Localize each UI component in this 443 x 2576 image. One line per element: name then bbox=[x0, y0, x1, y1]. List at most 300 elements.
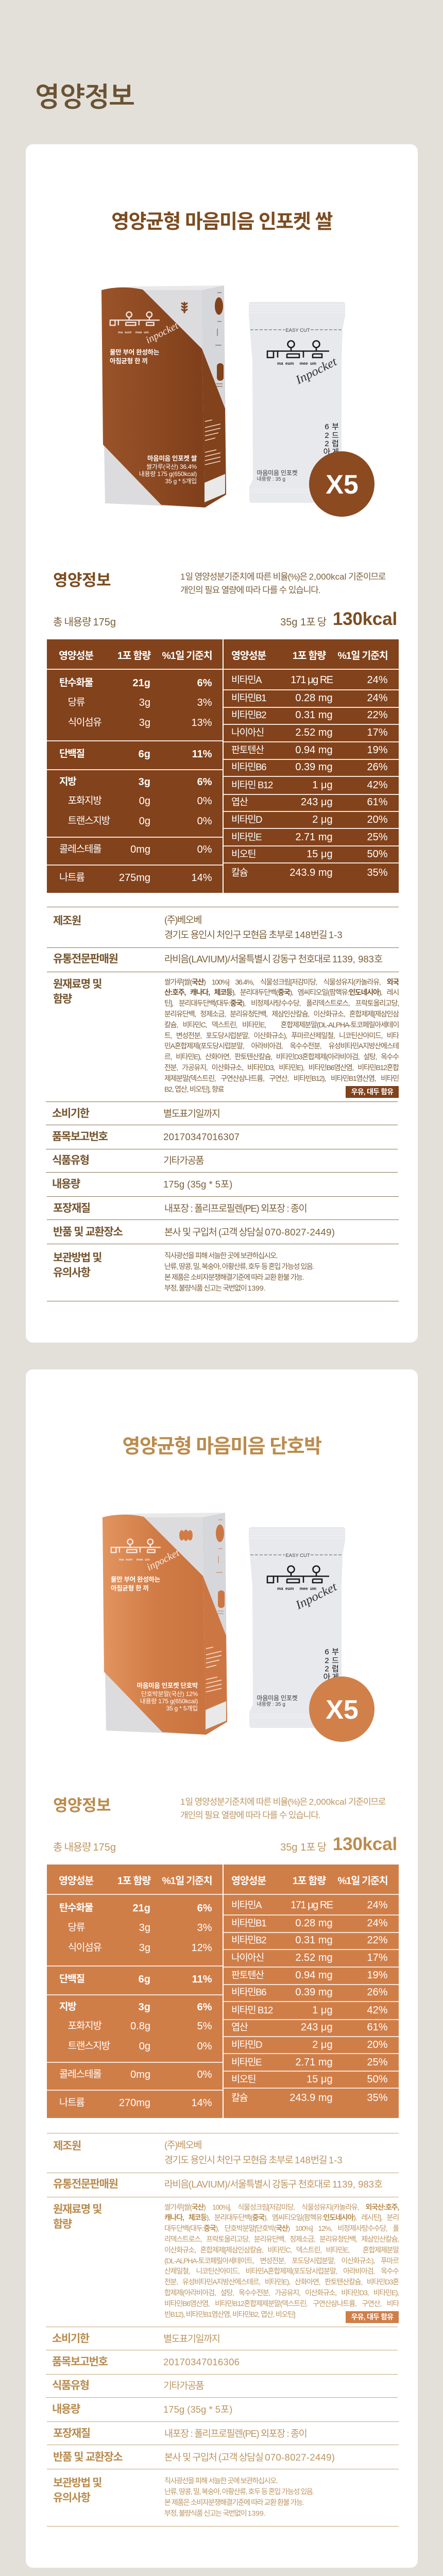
nutrition note: 1일 영양성분기준치에 따른 비율(%)은 2,000kcal 기준이므로 bbox=[180, 572, 385, 582]
table: macronutrients: 3g bbox=[139, 2002, 150, 2013]
box: 아침균형 한 끼 bbox=[111, 1584, 149, 1592]
total volume: 총 내용량 175g bbox=[53, 1842, 116, 1853]
table: vitamins and minerals: 25% bbox=[367, 832, 387, 843]
info: food type: 식품유형 bbox=[52, 2380, 89, 2392]
table: vitamins and minerals bbox=[224, 639, 399, 893]
table: macronutrients: 0g bbox=[139, 2041, 150, 2052]
info: ingredients: 트, 변성전분, 포도당시럽분말, 이산화규소), 푸마르산제일철, 니코틴산아미드, 비타 bbox=[164, 1031, 399, 1040]
nutrition heading: 영양정보 bbox=[53, 571, 111, 589]
table: vitamins and minerals: 0.39 mg bbox=[295, 761, 333, 773]
info: ingredients: 제제분말(덱스트린, 구연산삼나트륨, 구연산, 비타빈B12), 비타민B1염산염, 비타민 bbox=[164, 1074, 399, 1082]
table: macronutrients: 탄수화물 bbox=[59, 1902, 93, 1913]
table: macronutrients: 3g bbox=[139, 776, 150, 788]
table: macronutrients: 0% bbox=[197, 816, 212, 827]
nutrition heading: 영양정보 bbox=[53, 1797, 111, 1815]
box: 마음미음 인포켓 단호박 bbox=[137, 1682, 198, 1689]
table: vitamins and minerals: 비타민A bbox=[231, 1900, 261, 1910]
table: vitamins and minerals: 243 μg bbox=[301, 2022, 333, 2033]
nutrition note bbox=[180, 1797, 386, 1820]
pouch: 6 bbox=[325, 422, 329, 431]
info: ingredients: 산:호주, 캐나다, 체코등), 분리대두단백(중국), 엠씨티오일(팜핵유:인도네시아), 레시 bbox=[164, 988, 399, 996]
info: storage bbox=[47, 2469, 399, 2527]
info: manufacturer: (주)베오베 bbox=[164, 2140, 201, 2150]
table: vitamins and minerals: 0.94 mg bbox=[295, 1970, 333, 1981]
box: inpocket bbox=[144, 320, 180, 346]
pouch: Inpocket bbox=[293, 355, 340, 387]
table: macronutrients: 270mg bbox=[119, 2097, 150, 2109]
pouch: 마음미음 인포켓 bbox=[257, 1694, 298, 1702]
panel: rice bbox=[26, 144, 418, 1343]
table: vitamins and minerals: 0.39 mg bbox=[295, 1987, 333, 1998]
table: vitamins and minerals: 35% bbox=[367, 2092, 387, 2104]
table: macronutrients: 콜레스테롤 bbox=[59, 2069, 101, 2080]
table: vitamins and minerals: 비타민B6 bbox=[231, 761, 266, 772]
info: storage: 직사광선을 피해 서늘한 곳에 보관하십시오. bbox=[164, 2477, 277, 2485]
info: ingredients bbox=[47, 2197, 399, 2327]
table: vitamins and minerals: 0.94 mg bbox=[295, 744, 333, 756]
info: storage: 본 제품은 소비자분쟁해결기준에 따라 교환 환불 가능. bbox=[164, 2498, 303, 2506]
calories per pouch bbox=[280, 1834, 397, 1854]
info: report number: 품목보고번호 bbox=[52, 2356, 108, 2368]
info: expiry: 소비기한 bbox=[52, 2333, 89, 2345]
info: ingredients: 분리유단백, 정제소금, 분리유청단백, 제삼인산칼슘, 이산화규소, 혼합제제[제삼인삼 bbox=[164, 1010, 399, 1018]
table: vitamins and minerals: 비타민E bbox=[231, 2057, 261, 2067]
info: ingredients: 비타민B6염산염, 비타민B12혼합제제분말(덱스트린, 구연산삼나트륨, 구연산, 비타 bbox=[164, 2299, 399, 2308]
table: vitamins and minerals: 50% bbox=[367, 849, 387, 860]
info: ingredients: B2, 엽산, 비오틴], 향료 bbox=[164, 1085, 224, 1093]
info: packaging bbox=[47, 2421, 399, 2445]
table: vitamins and minerals: 22% bbox=[367, 709, 387, 721]
table: macronutrients bbox=[47, 1865, 223, 2118]
table: macronutrients: %1일 기준치 bbox=[162, 650, 212, 662]
allergen tag bbox=[346, 2311, 399, 2323]
table: vitamins and minerals: 2.52 mg bbox=[295, 1952, 333, 1963]
table: macronutrients: 0% bbox=[197, 2041, 212, 2052]
table: vitamins and minerals: 영양성분 bbox=[231, 650, 266, 662]
table: vitamins and minerals: 50% bbox=[367, 2074, 387, 2085]
info: packaging: 내포장 : 폴리프로필렌(PE) 외포장 : 종이 bbox=[164, 1203, 306, 1214]
table: macronutrients: 0% bbox=[197, 795, 212, 807]
table: vitamins and minerals: 24% bbox=[367, 674, 387, 686]
table: macronutrients: %1일 기준치 bbox=[162, 1875, 212, 1887]
pouch: 게 bbox=[332, 1673, 339, 1682]
table: vitamins and minerals: 비타민 B12 bbox=[231, 779, 272, 790]
info: ingredients bbox=[47, 972, 399, 1101]
pouch: 2 bbox=[325, 431, 329, 440]
table: macronutrients: 6g bbox=[139, 749, 150, 760]
table: macronutrients: 단백질 bbox=[59, 1974, 84, 1985]
table: macronutrients: 트랜스지방 bbox=[68, 816, 110, 826]
table: vitamins and minerals: 2.71 mg bbox=[295, 2057, 333, 2068]
info: storage: 부정, 불량식품 신고는 국번없이 1399. bbox=[164, 2509, 266, 2517]
table: vitamins and minerals: 칼슘 bbox=[231, 867, 247, 878]
table: vitamins and minerals: 17% bbox=[367, 727, 387, 738]
pouch: 아 bbox=[323, 1673, 331, 1682]
info: expiry: 별도표기일까지 bbox=[163, 1108, 219, 1119]
info: packaging: 포장재질 bbox=[53, 2428, 90, 2439]
table: macronutrients: 12% bbox=[191, 1942, 212, 1954]
table: vitamins and minerals: 42% bbox=[367, 779, 387, 791]
nutrition note: 개인의 필요 열량에 따라 다를 수 있습니다. bbox=[180, 585, 320, 595]
box bbox=[101, 285, 226, 507]
table: macronutrients: 3% bbox=[197, 697, 212, 708]
table: macronutrients: 11% bbox=[192, 749, 212, 760]
table: vitamins and minerals: 15 μg bbox=[306, 849, 333, 860]
box: 아침균형 한 끼 bbox=[110, 357, 148, 365]
table: macronutrients: 영양성분 bbox=[59, 1875, 93, 1887]
info: ingredients: 쌀가루[쌀(국산) 100%], 식물성크림[저감미당, 식물성유지(카놀라유, 외국산:호주, bbox=[164, 2203, 399, 2211]
info: returns: 본사 및 구입처 (고객 상담실 070-8027-2449) bbox=[164, 2452, 334, 2463]
info: storage: 난류, 땅콩, 밀, 복숭아, 아황산류, 호두 등 혼입 가능성 있음. bbox=[164, 1262, 314, 1270]
info: report number bbox=[46, 1125, 398, 1149]
pouch: 2 bbox=[325, 1656, 329, 1665]
info: ingredients: 전분, 가공유지, 이산화규소, 비타민D3, 비타민E), 비타민B6염산염, 비타민B12혼합 bbox=[164, 1063, 399, 1072]
table: vitamins and minerals: 35% bbox=[367, 867, 387, 878]
info: returns bbox=[47, 1219, 399, 1244]
pouch: 게 bbox=[332, 448, 339, 456]
info: distributor bbox=[47, 947, 399, 972]
pouch: 내용량 : 35 g bbox=[257, 1701, 285, 1707]
info: ingredients: 대두단백(대두:중국), 단호박분말[단호박(국산) 100%] 12%, 비정제사탕수수당, 폴 bbox=[164, 2224, 399, 2232]
info: manufacturer: 제조원 bbox=[53, 2140, 81, 2152]
info: ingredients: 쌀가루[쌀(국산) 100%] 36.4%, 식물성크림[저감미당, 식물성유지(카놀라유, 외국 bbox=[164, 978, 399, 986]
info: ingredients: 캐나다, 체코등), 분리대두단백(중국), 엠씨티오일(팜핵유:인도네시아), 레시틴], 분리 bbox=[164, 2213, 399, 2222]
info: volume bbox=[46, 1172, 398, 1197]
info: volume: 내용량 bbox=[52, 2403, 80, 2415]
table: vitamins and minerals: 1 μg bbox=[312, 779, 333, 791]
table: vitamins and minerals: 19% bbox=[367, 1970, 387, 1981]
table: macronutrients: 0g bbox=[139, 795, 150, 807]
table: vitamins and minerals: 1 μg bbox=[312, 2005, 333, 2016]
info: ingredients: 전분, 유성비타민A지방산에스테르, 비타민E), 산화아연, 판토텐산칼슘, 비타민D3혼 bbox=[164, 2278, 399, 2286]
table: vitamins and minerals: 243.9 mg bbox=[289, 867, 333, 878]
info: ingredients: (DL-ALPHA-토코페릴아세테이트, 변성전분, 포도당시럽분말, 이산화규소), 푸마르 bbox=[164, 2257, 399, 2265]
calories per pouch: 130kcal bbox=[333, 1834, 397, 1854]
product image: box and pouch x5 bbox=[101, 285, 374, 517]
table: vitamins and minerals: 비타민B2 bbox=[231, 709, 266, 720]
info: storage: 유의사항 bbox=[53, 2492, 90, 2504]
pouch: 드 bbox=[332, 1656, 339, 1665]
pouch: 6 bbox=[325, 1648, 329, 1656]
table: vitamins and minerals: 비타민 B12 bbox=[231, 2005, 272, 2015]
table: vitamins and minerals: 1포 함량 bbox=[293, 1875, 326, 1887]
info: manufacturer: 경기도 용인시 처인구 모현읍 초부로 148번길 1-3 bbox=[164, 2155, 343, 2165]
table: vitamins and minerals: 17% bbox=[367, 1952, 387, 1963]
info: ingredients: 함량 bbox=[53, 2218, 72, 2230]
box bbox=[103, 1513, 227, 1735]
table: macronutrients: 14% bbox=[191, 872, 212, 884]
table: vitamins and minerals: 비오틴 bbox=[231, 2074, 255, 2084]
info: ingredients: 원재료명 및 bbox=[53, 2203, 101, 2215]
table: vitamins and minerals: %1일 기준치 bbox=[338, 1875, 387, 1887]
table: macronutrients: 21g bbox=[133, 1902, 150, 1913]
info: storage: 부정, 불량식품 신고는 국번없이 1399. bbox=[164, 1284, 266, 1292]
info: distributor bbox=[47, 2173, 399, 2197]
table: vitamins and minerals: 0.28 mg bbox=[295, 1918, 333, 1929]
table: vitamins and minerals: 비타민B1 bbox=[231, 1918, 266, 1928]
table: vitamins and minerals: 1포 함량 bbox=[293, 650, 326, 662]
info: food type: 기타가공품 bbox=[163, 1155, 203, 1166]
info: volume bbox=[46, 2397, 398, 2422]
table: vitamins and minerals: 15 μg bbox=[306, 2074, 333, 2085]
info: manufacturer bbox=[47, 2133, 399, 2173]
box: inpocket bbox=[145, 1547, 181, 1573]
pouch: Inpocket bbox=[293, 1580, 340, 1613]
info: distributor: 유통전문판매원 bbox=[53, 953, 117, 965]
box: 물만 부어 완성하는 bbox=[110, 349, 159, 356]
calories per pouch: 35g 1포 당 bbox=[280, 617, 326, 628]
badge: x5: X5 bbox=[326, 1695, 359, 1725]
table: vitamins and minerals: 나이아신 bbox=[231, 727, 264, 738]
nutrition note bbox=[180, 572, 386, 595]
table: macronutrients: 3g bbox=[139, 1942, 150, 1954]
table: macronutrients: 6% bbox=[197, 1902, 212, 1913]
table: vitamins and minerals: 비오틴 bbox=[231, 849, 255, 859]
pouch: 부 bbox=[332, 422, 339, 431]
badge: x5: X5 bbox=[326, 470, 359, 500]
calories per pouch: 35g 1포 당 bbox=[280, 1842, 326, 1853]
table: vitamins and minerals: 2.52 mg bbox=[295, 727, 333, 738]
table: vitamins and minerals: 61% bbox=[367, 2022, 387, 2033]
pouch: 럽 bbox=[332, 439, 339, 448]
calories per pouch bbox=[280, 609, 397, 629]
table: macronutrients: 0g bbox=[139, 816, 150, 827]
info: packaging bbox=[47, 1196, 399, 1220]
title: 영양정보 bbox=[35, 83, 134, 110]
table: vitamins and minerals: 비타민D bbox=[231, 2039, 262, 2050]
pouch: ma eum mee um bbox=[277, 361, 316, 366]
table: macronutrients: 콜레스테롤 bbox=[59, 844, 101, 855]
info: ingredients: 리덱스트로스, 프락토올리고당, 분리유단백, 정제소금, 분리유청단백, 제삼인산칼슘, bbox=[164, 2235, 399, 2243]
table: vitamins and minerals: 24% bbox=[367, 1900, 387, 1911]
table: vitamins and minerals: 비타민B6 bbox=[231, 1987, 266, 1997]
table: macronutrients: 3g bbox=[139, 717, 150, 728]
table: vitamins and minerals: 비타민A bbox=[231, 674, 261, 685]
table: vitamins and minerals: 24% bbox=[367, 692, 387, 704]
table: vitamins and minerals: 171 μg RE bbox=[291, 1900, 333, 1911]
table: macronutrients: 포화지방 bbox=[68, 795, 101, 806]
table: macronutrients: 14% bbox=[191, 2097, 212, 2109]
table: vitamins and minerals: 61% bbox=[367, 796, 387, 808]
pouch bbox=[249, 1527, 345, 1728]
info: ingredients: 칼슘, 비타민C, 덱스트린, 비타민E, 혼합제제분말(DL-ALPHA-토코페릴아세테이 bbox=[164, 1021, 399, 1029]
table: macronutrients: 영양성분 bbox=[59, 650, 93, 662]
info: manufacturer: 제조원 bbox=[53, 915, 81, 927]
table: macronutrients: 나트륨 bbox=[59, 2097, 84, 2108]
info: returns bbox=[47, 2445, 399, 2469]
box: 물만 부어 완성하는 bbox=[111, 1576, 160, 1583]
box: 마음미음 인포켓 쌀 bbox=[147, 455, 197, 462]
allergen tag: 우유, 대두 함유 bbox=[351, 1088, 393, 1096]
info: storage: 직사광선을 피해 서늘한 곳에 보관하십시오. bbox=[164, 1251, 277, 1260]
heading: rice product: 영양균형 마음미음 인포켓 쌀 bbox=[111, 211, 332, 233]
table: vitamins and minerals: 26% bbox=[367, 761, 387, 773]
table: macronutrients: 6% bbox=[197, 776, 212, 788]
info: food type: 식품유형 bbox=[52, 1155, 89, 1166]
info: ingredients: 르, 비타민E), 산화아연, 판토텐산칼슘, 비타민D3혼합제제(아라비아검, 설탕, 옥수수 bbox=[164, 1053, 399, 1061]
info: ingredients: 이산화규소, 혼합제제[제삼인삼칼슘, 비타민C, 덱스트린, 비타민E, 혼합제제분말 bbox=[164, 2246, 399, 2254]
info: manufacturer: 경기도 용인시 처인구 모현읍 초부로 148번길 1-3 bbox=[164, 929, 343, 940]
table: vitamins and minerals bbox=[224, 1865, 399, 2118]
info: volume: 내용량 bbox=[52, 1178, 80, 1190]
table: vitamins and minerals: 칼슘 bbox=[231, 2092, 247, 2103]
table: macronutrients: 5% bbox=[197, 2021, 212, 2032]
info: distributor: 유통전문판매원 bbox=[53, 2178, 117, 2190]
info: packaging: 내포장 : 폴리프로필렌(PE) 외포장 : 종이 bbox=[164, 2428, 306, 2439]
table: vitamins and minerals: 판토텐산 bbox=[231, 744, 264, 755]
allergen tag: 우유, 대두 함유 bbox=[351, 2313, 393, 2321]
table: macronutrients: 식이섬유 bbox=[68, 1942, 101, 1953]
table: vitamins and minerals: 0.31 mg bbox=[295, 1935, 333, 1946]
panel: sweet pumpkin bbox=[26, 1369, 418, 2568]
table: vitamins and minerals: 0.28 mg bbox=[295, 692, 333, 704]
badge: x5 bbox=[309, 451, 374, 517]
table: vitamins and minerals: 26% bbox=[367, 1987, 387, 1998]
table: vitamins and minerals: 엽산 bbox=[231, 2022, 247, 2032]
info: storage: 유의사항 bbox=[53, 1267, 90, 1279]
table: macronutrients: 포화지방 bbox=[68, 2021, 101, 2031]
table: macronutrients: 0.8g bbox=[130, 2021, 150, 2032]
info: ingredients: 틴], 분리대두단백(대두:중국), 비정제사탕수수당, 폴리덱스트로스, 프락토올리고당, bbox=[164, 999, 399, 1007]
info: manufacturer bbox=[47, 907, 399, 948]
table: macronutrients: 지방 bbox=[59, 2002, 76, 2012]
table: macronutrients: 1포 함량 bbox=[117, 650, 150, 662]
badge: x5 bbox=[309, 1676, 374, 1742]
info: ingredients: 민A혼합제제(포도당시럽분말, 아라비아검, 옥수수전분, 유성비타민A지방산에스테 bbox=[164, 1042, 399, 1050]
info: storage: 난류, 땅콩, 밀, 복숭아, 아황산류, 호두 등 혼입 가능성 있음. bbox=[164, 2487, 314, 2496]
table: macronutrients: 275mg bbox=[119, 872, 150, 884]
allergen tag bbox=[346, 1086, 399, 1097]
pouch bbox=[249, 302, 345, 503]
info: food type bbox=[46, 1149, 398, 1173]
pouch: 내용량 : 35 g bbox=[257, 476, 285, 482]
table: macronutrients: 식이섬유 bbox=[68, 717, 101, 728]
info: manufacturer: (주)베오베 bbox=[164, 914, 201, 925]
table: macronutrients bbox=[47, 639, 223, 893]
info: returns: 본사 및 구입처 (고객 상담실 070-8027-2449) bbox=[164, 1227, 334, 1238]
table: vitamins and minerals: 20% bbox=[367, 2039, 387, 2050]
table: vitamins and minerals: 2 μg bbox=[312, 2039, 333, 2050]
pouch: ma eum mee um bbox=[277, 1586, 316, 1591]
pouch: EASY CUT bbox=[285, 328, 310, 333]
nutrition note: 개인의 필요 열량에 따라 다를 수 있습니다. bbox=[180, 1810, 320, 1820]
table: macronutrients: 트랜스지방 bbox=[68, 2041, 110, 2052]
total volume: 총 내용량 175g bbox=[53, 617, 116, 628]
table: vitamins and minerals: 판토텐산 bbox=[231, 1970, 264, 1980]
table: vitamins and minerals: 25% bbox=[367, 2057, 387, 2068]
table: macronutrients: 0mg bbox=[130, 2069, 150, 2080]
table: vitamins and minerals: 19% bbox=[367, 744, 387, 756]
pouch: 드 bbox=[332, 431, 339, 440]
table: vitamins and minerals: 22% bbox=[367, 1935, 387, 1946]
info: ingredients: 빈B12), 비타민B1염산염, 비타민B2, 엽산, 비오틴] bbox=[164, 2310, 295, 2318]
info: storage: 본 제품은 소비자분쟁해결기준에 따라 교환 환불 가능. bbox=[164, 1273, 303, 1281]
table: macronutrients: 6% bbox=[197, 2002, 212, 2013]
table: macronutrients: 1포 함량 bbox=[117, 1875, 150, 1887]
table: vitamins and minerals: 171 μg RE bbox=[291, 674, 333, 686]
info: storage bbox=[47, 1244, 399, 1301]
box: 단호박분말(국산) 12% bbox=[141, 1690, 198, 1698]
table: vitamins and minerals: 42% bbox=[367, 2005, 387, 2016]
table: macronutrients: 0% bbox=[197, 844, 212, 855]
box: 내용량 175 g(650kcal) bbox=[139, 470, 197, 478]
table: vitamins and minerals: 2.71 mg bbox=[295, 832, 333, 843]
info: report number: 20170347016307 bbox=[163, 1131, 240, 1142]
table: macronutrients: 단백질 bbox=[59, 749, 84, 759]
table: vitamins and minerals: 0.31 mg bbox=[295, 709, 333, 721]
table: vitamins and minerals: 영양성분 bbox=[231, 1875, 266, 1887]
info: expiry: 소비기한 bbox=[52, 1108, 89, 1120]
info: ingredients: 산제일철, 니코틴산아미드, 비타민A혼합제제(포도당시럽분말, 아라비아검, 옥수수 bbox=[164, 2267, 399, 2275]
box: ma eum mee um bbox=[118, 331, 149, 334]
table: vitamins and minerals: 24% bbox=[367, 1918, 387, 1929]
info: volume: 175g (35g * 5포) bbox=[163, 2404, 232, 2415]
table: macronutrients: 지방 bbox=[59, 776, 76, 787]
table: vitamins and minerals: 비타민B2 bbox=[231, 1935, 266, 1945]
table: vitamins and minerals: 2 μg bbox=[312, 814, 333, 825]
info: ingredients: 합제제(아라비아검, 설탕, 옥수수전분, 가공유지, 이산화규소, 비타민D3, 비타민E), bbox=[164, 2289, 399, 2297]
table: macronutrients: 21g bbox=[133, 677, 150, 688]
box: 내용량 175 g(650kcal) bbox=[140, 1698, 198, 1705]
info: expiry: 별도표기일까지 bbox=[163, 2333, 219, 2344]
pouch: 마음미음 인포켓 bbox=[257, 469, 298, 477]
table: vitamins and minerals: 비타민B1 bbox=[231, 692, 266, 703]
info: expiry bbox=[46, 2327, 398, 2350]
box: ma eum mee um bbox=[119, 1558, 150, 1562]
box: 35 g * 5개입 bbox=[165, 478, 197, 485]
info: packaging: 포장재질 bbox=[53, 1202, 90, 1214]
info: food type: 기타가공품 bbox=[163, 2380, 203, 2391]
table: vitamins and minerals: 비타민D bbox=[231, 814, 262, 825]
table: vitamins and minerals: 20% bbox=[367, 814, 387, 825]
table: macronutrients: 0% bbox=[197, 2069, 212, 2080]
info: expiry bbox=[46, 1101, 398, 1125]
pouch: 2 bbox=[325, 1665, 329, 1673]
table: macronutrients: 0mg bbox=[130, 844, 150, 855]
table: vitamins and minerals: %1일 기준치 bbox=[338, 650, 387, 662]
product image: box and pouch x5 bbox=[103, 1513, 374, 1742]
pouch: 아 bbox=[323, 448, 331, 456]
box: 쌀가루(국산) 36.4% bbox=[146, 463, 197, 470]
table: macronutrients: 당류 bbox=[68, 697, 84, 708]
table: macronutrients: 당류 bbox=[68, 1922, 84, 1933]
box: 35 g * 5개입 bbox=[166, 1705, 198, 1712]
info: distributor: 라비음(LAVIUM)/서울특별시 강동구 천호대로 1139, 983호 bbox=[164, 954, 382, 964]
table: vitamins and minerals: 비타민E bbox=[231, 832, 261, 842]
info: report number: 20170347016306 bbox=[163, 2357, 240, 2367]
info: ingredients: 원재료명 및 bbox=[53, 978, 101, 990]
calories per pouch: 130kcal bbox=[333, 609, 397, 629]
info: ingredients: 함량 bbox=[53, 993, 72, 1005]
table: vitamins and minerals: 나이아신 bbox=[231, 1952, 264, 1963]
table: macronutrients: 6% bbox=[197, 677, 212, 688]
table: macronutrients: 3g bbox=[139, 697, 150, 708]
info: distributor: 라비음(LAVIUM)/서울특별시 강동구 천호대로 1139, 983호 bbox=[164, 2179, 382, 2190]
table: macronutrients: 3g bbox=[139, 1922, 150, 1934]
table: vitamins and minerals: 엽산 bbox=[231, 796, 247, 807]
table: vitamins and minerals: 243.9 mg bbox=[289, 2092, 333, 2104]
table: macronutrients: 6g bbox=[139, 1974, 150, 1985]
info: food type bbox=[46, 2374, 398, 2398]
pouch: 부 bbox=[332, 1648, 339, 1656]
nutrition note: 1일 영양성분기준치에 따른 비율(%)은 2,000kcal 기준이므로 bbox=[180, 1797, 385, 1807]
info: storage: 보관방법 및 bbox=[53, 2477, 101, 2489]
heading: pumpkin product: 영양균형 마음미음 단호박 bbox=[122, 1436, 321, 1458]
info: storage: 보관방법 및 bbox=[53, 1252, 101, 1264]
table: macronutrients: 나트륨 bbox=[59, 872, 84, 883]
info: report number: 품목보고번호 bbox=[52, 1131, 108, 1143]
pouch: 럽 bbox=[332, 1665, 339, 1673]
